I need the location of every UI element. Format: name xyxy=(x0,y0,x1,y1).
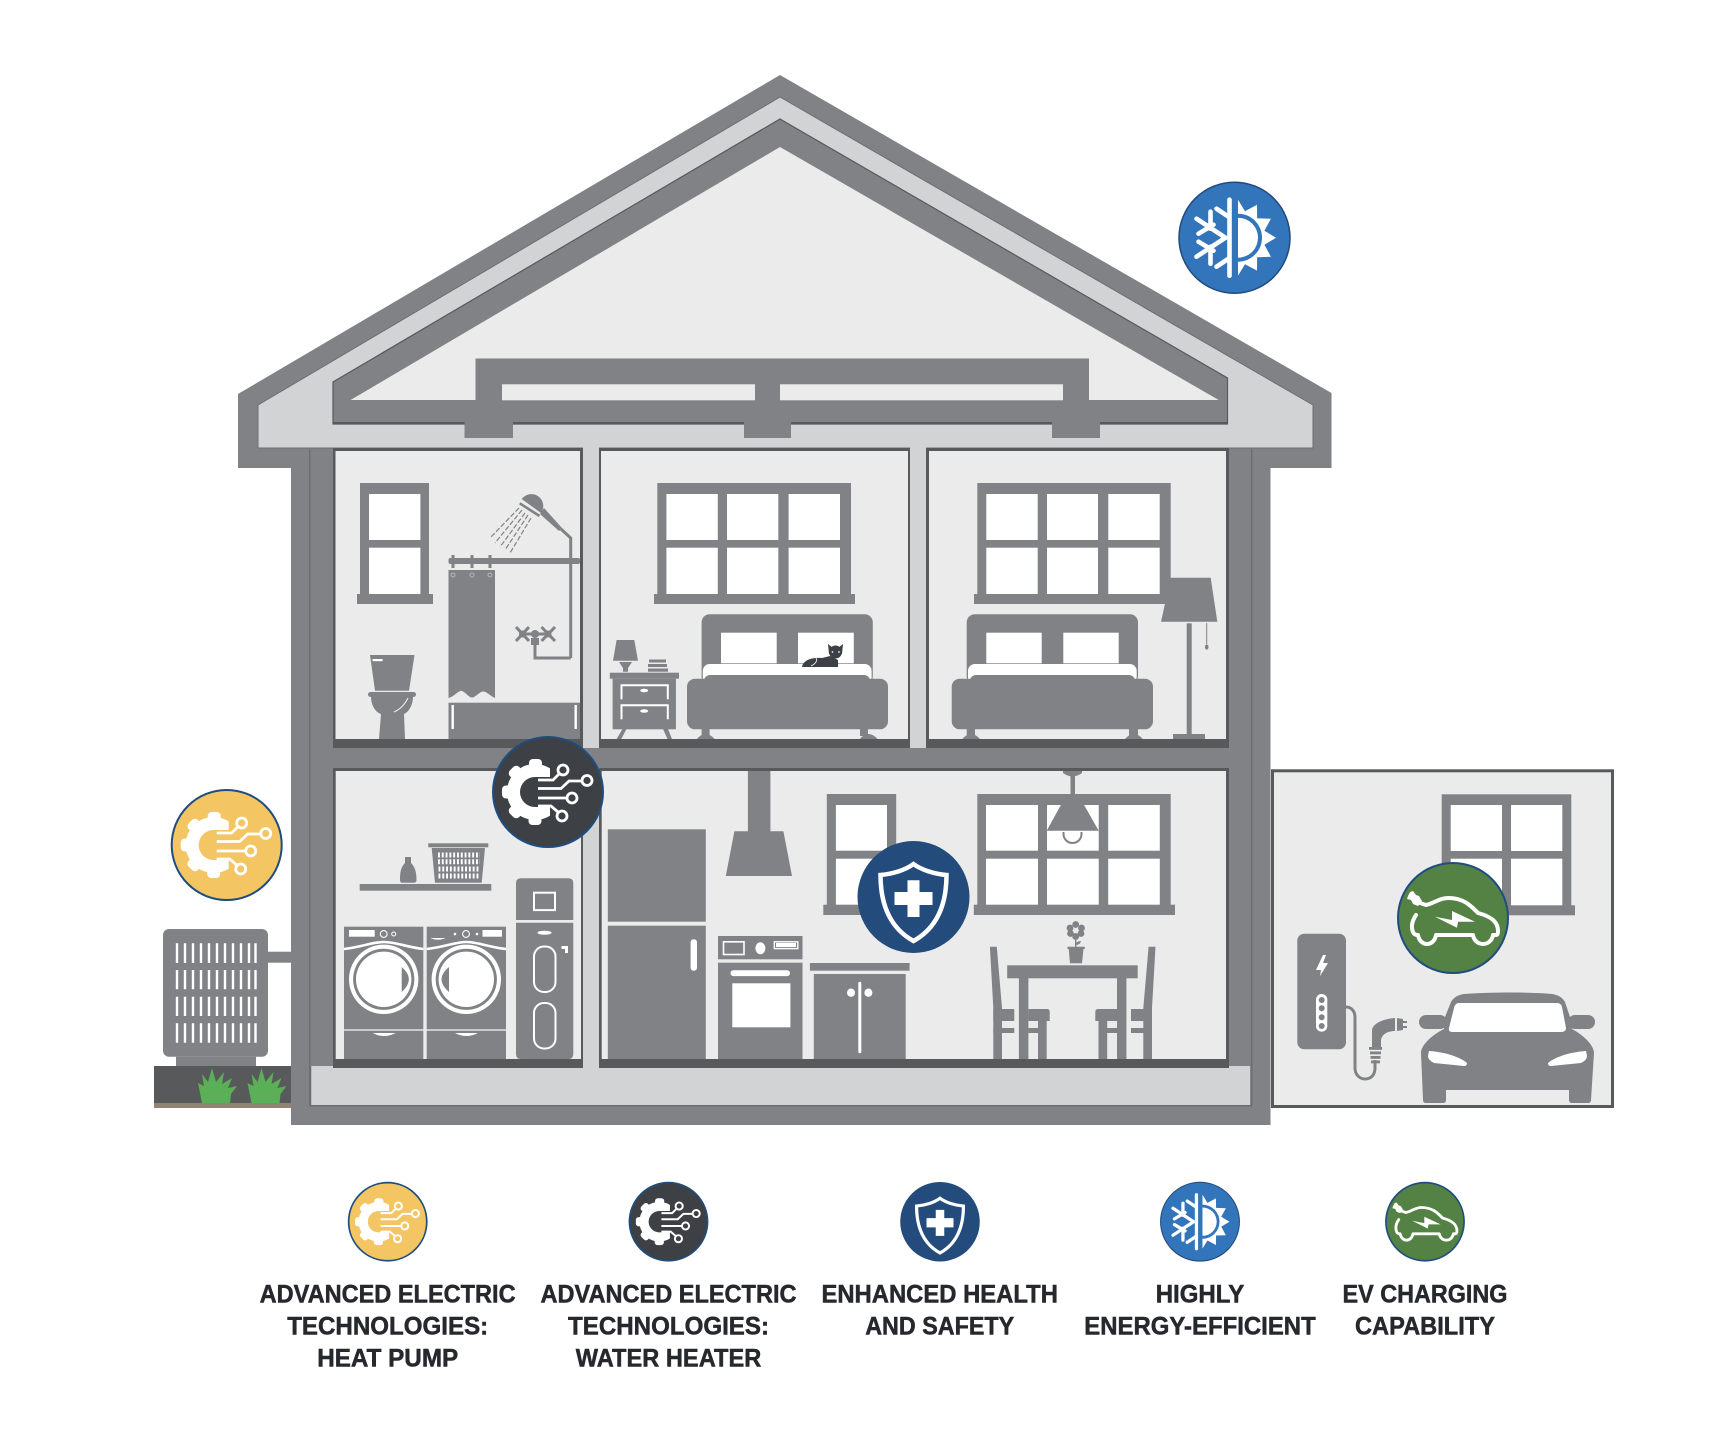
room: bathroom xyxy=(333,448,583,748)
garage xyxy=(1272,771,1612,1106)
shower xyxy=(448,494,580,658)
EV charger xyxy=(1297,934,1346,1049)
legend label: water heater: WATER HEATER xyxy=(576,1345,761,1373)
toilet xyxy=(368,655,416,739)
legend item: heat pump xyxy=(260,1183,516,1373)
icon: health and safety badge xyxy=(858,841,970,953)
wall lines xyxy=(309,449,310,1106)
charging cable and plug xyxy=(1346,1007,1407,1079)
legend label: EV charging: EV CHARGING xyxy=(1342,1281,1508,1309)
attic duct xyxy=(464,358,1100,438)
table lamp and books xyxy=(613,640,668,672)
legend item: EV charging xyxy=(1342,1183,1508,1341)
legend label: water heater xyxy=(540,1281,796,1373)
nightstand xyxy=(610,673,679,739)
dining window xyxy=(974,794,1175,915)
icon: energy efficient badge xyxy=(1179,182,1290,293)
faucet xyxy=(516,627,555,645)
legend icon: EV charging xyxy=(1386,1183,1464,1261)
pendant light xyxy=(1047,771,1099,843)
oven xyxy=(718,936,802,1059)
water heater xyxy=(516,878,573,1059)
legend item: water heater xyxy=(540,1183,796,1373)
bedroom window xyxy=(654,483,855,604)
legend label: heat pump: TECHNOLOGIES: xyxy=(287,1313,488,1341)
outdoor heat pump unit xyxy=(154,929,291,1108)
garage window xyxy=(1438,794,1575,915)
refrigerant pipe xyxy=(268,952,291,963)
legend label: energy efficient xyxy=(1084,1281,1316,1341)
legend icon: water heater xyxy=(629,1183,708,1261)
unit grille xyxy=(177,943,256,1043)
dryer xyxy=(427,927,506,1059)
washer xyxy=(344,927,423,1059)
house structure xyxy=(238,75,1332,1125)
legend label: energy efficient: HIGHLY xyxy=(1156,1281,1245,1309)
legend icon: health and safety xyxy=(900,1182,980,1261)
icon: heat pump badge xyxy=(172,790,282,900)
bathtub xyxy=(448,703,580,739)
bedroom two furnishings xyxy=(952,483,1217,739)
attic frame xyxy=(333,119,1228,424)
refrigerator xyxy=(608,829,706,1059)
shelf xyxy=(360,884,491,891)
legend label: EV charging xyxy=(1342,1281,1508,1341)
bedroom one furnishings xyxy=(610,483,888,739)
attic interior xyxy=(351,147,1219,400)
left chair xyxy=(990,947,1050,1059)
cabinet xyxy=(810,963,910,1059)
range hood xyxy=(726,771,792,876)
bed one xyxy=(687,614,888,739)
legend item: energy efficient xyxy=(1084,1182,1316,1341)
legend label: heat pump: HEAT PUMP xyxy=(317,1345,458,1373)
floor lamp xyxy=(1161,578,1217,739)
icon: EV charging badge xyxy=(1398,863,1508,973)
legend label: water heater: ADVANCED ELECTRIC xyxy=(540,1281,796,1309)
legend label: water heater: TECHNOLOGIES: xyxy=(568,1313,769,1341)
icon: water heater badge xyxy=(493,737,603,847)
foundation band xyxy=(310,1066,1251,1106)
legend label: heat pump xyxy=(260,1281,516,1373)
roof outer shell xyxy=(238,75,1332,1125)
legend label: health and safety xyxy=(821,1281,1058,1341)
bed two xyxy=(952,614,1153,739)
legend label: health and safety: AND SAFETY xyxy=(865,1313,1014,1341)
bedroom two window xyxy=(974,483,1171,604)
legend label: health and safety: ENHANCED HEALTH xyxy=(821,1281,1058,1309)
roof light band xyxy=(258,97,1313,448)
laundry basket xyxy=(428,843,488,883)
room: bedroom two xyxy=(926,448,1229,748)
bathroom window xyxy=(357,483,433,604)
room: kitchen and dining xyxy=(599,768,1229,1068)
room: bedroom one xyxy=(599,448,910,748)
electric car xyxy=(1419,992,1595,1103)
kitchen window xyxy=(823,794,900,915)
legend label: heat pump: ADVANCED ELECTRIC xyxy=(260,1281,516,1309)
legend label: energy efficient: ENERGY-EFFICIENT xyxy=(1084,1313,1316,1341)
legend label: EV charging: CAPABILITY xyxy=(1355,1313,1495,1341)
flower pot xyxy=(1067,921,1085,963)
kitchen furnishings xyxy=(608,771,1175,1059)
interior wall columns xyxy=(583,447,926,1068)
legend icon: heat pump xyxy=(349,1183,427,1261)
unit body xyxy=(163,929,268,1057)
right chair xyxy=(1095,947,1156,1059)
black cat xyxy=(802,644,843,667)
shower curtain xyxy=(448,570,495,698)
grass clumps xyxy=(198,1068,286,1103)
legend item: health and safety xyxy=(821,1182,1058,1341)
dining table xyxy=(1007,965,1138,1059)
laundry room furnishings xyxy=(344,843,573,1059)
room: laundry xyxy=(333,768,583,1068)
ground strip xyxy=(154,1066,291,1103)
legend icon: energy efficient xyxy=(1161,1182,1239,1261)
garage room xyxy=(1272,771,1612,1106)
detergent bottle xyxy=(400,857,416,883)
bathroom furnishings xyxy=(357,483,580,739)
